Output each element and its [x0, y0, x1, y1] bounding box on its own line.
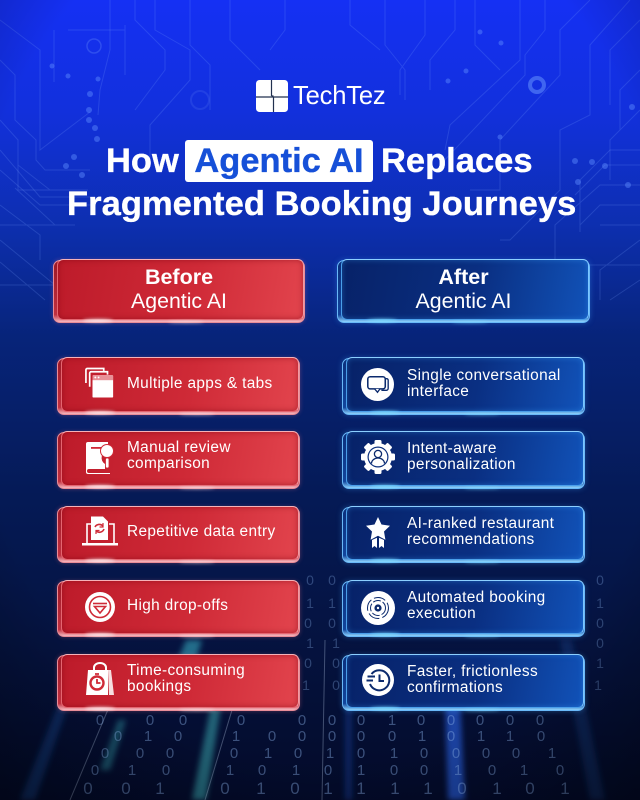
label [407, 663, 538, 696]
background: circuit board and binary pattern: 0 [556, 762, 564, 779]
background: circuit board and binary pattern: 0 [83, 779, 93, 798]
label: Intent-aware [407, 440, 497, 457]
label: confirmations [407, 679, 503, 696]
background: circuit board and binary pattern: 1 [596, 595, 604, 611]
background: circuit board and binary pattern: 0 [420, 762, 428, 779]
background: circuit board and binary pattern: 1 [128, 762, 136, 779]
background: circuit board and binary pattern: 0 [525, 779, 535, 798]
title word: Replaces: Replaces [381, 142, 533, 180]
heading: After Agentic AI: After [438, 265, 489, 289]
background: circuit board and binary pattern: 0 [230, 745, 238, 762]
background: circuit board and binary pattern: 1 [506, 728, 514, 745]
label: Single conversational [407, 367, 561, 384]
background: circuit board and binary pattern: 0 [332, 655, 340, 671]
background: circuit board and binary pattern: 0 [328, 572, 336, 588]
background: circuit board and binary pattern: 0 [101, 745, 109, 762]
background: circuit board and binary pattern: 0 [447, 728, 455, 745]
background: circuit board and binary pattern: 1 [264, 745, 272, 762]
background: circuit board and binary pattern: 1 [326, 745, 334, 762]
label: recommendations [407, 531, 535, 548]
background: circuit board and binary pattern: 0 [162, 762, 170, 779]
row: time-consuming bookings [54, 652, 302, 714]
background: circuit board and binary pattern: 0 [357, 712, 365, 729]
icon: book with magnifier [86, 442, 114, 474]
heading: After Agentic AI: Agentic AI [416, 289, 511, 313]
background: circuit board and binary pattern: 1 [292, 762, 300, 779]
background: circuit board and binary pattern: 1 [328, 595, 336, 611]
background: circuit board and binary pattern: 0 [136, 745, 144, 762]
label: execution [407, 605, 476, 622]
background: circuit board and binary pattern: 1 [423, 779, 433, 798]
background: circuit board and binary pattern: 0 [290, 779, 300, 798]
icon: orbit gear [361, 591, 395, 625]
background: circuit board and binary pattern: 0 [121, 779, 131, 798]
background: circuit board and binary pattern: 0 [357, 745, 365, 762]
background: circuit board and binary pattern: 0 [328, 712, 336, 729]
icon: chat bubbles [361, 368, 394, 401]
label: Automated booking [407, 589, 546, 606]
background: circuit board and binary pattern: 0 [146, 712, 154, 729]
background: circuit board and binary pattern: 1 [520, 762, 528, 779]
icon: fast clock [362, 664, 394, 696]
background: circuit board and binary pattern: 1 [144, 728, 152, 745]
row: AI-ranked restaurant recommendations [339, 504, 588, 566]
background: circuit board and binary pattern: 1 [477, 728, 485, 745]
background: circuit board and binary pattern: 0 [96, 712, 104, 729]
label: Faster, frictionless [407, 663, 538, 680]
heading: Before Agentic AI: Before [145, 265, 213, 289]
icon: logo window mark [256, 80, 288, 112]
heading: After Agentic AI [416, 265, 511, 313]
background: circuit board and binary pattern: 0 [306, 572, 314, 588]
label: bookings [127, 678, 191, 695]
label: personalization [407, 456, 516, 473]
row: faster frictionless confirmations [339, 652, 588, 714]
background: circuit board and binary pattern: 0 [304, 655, 312, 671]
background: circuit board and binary pattern: 1 [560, 779, 570, 798]
title line two: Fragmented Booking Journeys [67, 185, 576, 223]
label [407, 367, 561, 400]
wordmark: TechTez [293, 82, 386, 110]
background: circuit board and binary pattern: 1 [357, 762, 365, 779]
background: circuit board and binary pattern: 0 [268, 728, 276, 745]
row: intent-aware personalization [339, 430, 588, 492]
label: Manual review [127, 439, 231, 456]
panel: after header [334, 258, 592, 326]
background: circuit board and binary pattern: 1 [548, 745, 556, 762]
title highlight: Agentic AI: Agentic AI [194, 142, 364, 180]
background: circuit board and binary pattern: 0 [91, 762, 99, 779]
background: circuit board and binary pattern: 0 [220, 779, 230, 798]
row: multiple apps and tabs [54, 356, 302, 418]
background: circuit board and binary pattern: 1 [306, 595, 314, 611]
background: circuit board and binary pattern: 0 [304, 615, 312, 631]
label: comparison [127, 455, 210, 472]
background: circuit board and binary pattern: 1 [356, 779, 366, 798]
background: circuit board and binary pattern: 1 [306, 635, 314, 651]
background: circuit board and binary pattern: 0 [457, 779, 467, 798]
label: Repetitive data entry [127, 523, 276, 540]
label [407, 589, 546, 622]
background: circuit board and binary pattern: 0 [298, 712, 306, 729]
label: Time-consuming [127, 662, 245, 679]
background: circuit board and binary pattern: 1 [418, 728, 426, 745]
title [67, 140, 576, 223]
background: circuit board and binary pattern: 0 [482, 745, 490, 762]
background: circuit board and binary pattern: 0 [506, 712, 514, 729]
background: circuit board and binary pattern: 1 [155, 779, 165, 798]
background: circuit board and binary pattern: 0 [390, 762, 398, 779]
label [407, 440, 516, 473]
row: single conversational interface [340, 356, 588, 418]
icon: star award [366, 517, 390, 548]
icon: shopping bag with stopwatch [86, 662, 114, 695]
row: repetitive data entry [54, 504, 302, 566]
background: circuit board and binary pattern: 0 [294, 745, 302, 762]
background: circuit board and binary pattern: 1 [226, 762, 234, 779]
label [407, 515, 554, 548]
label [127, 439, 231, 472]
row: automated booking execution [339, 578, 588, 640]
background: circuit board and binary pattern: 1 [232, 728, 240, 745]
background: circuit board and binary pattern: 0 [332, 677, 340, 693]
icon: gear with person [361, 440, 395, 474]
background: circuit board and binary pattern: 1 [388, 712, 396, 729]
background: circuit board and binary pattern: 0 [179, 712, 187, 729]
icon: drop-off circle [85, 592, 115, 622]
background: circuit board and binary pattern: 0 [420, 745, 428, 762]
background: circuit board and binary pattern: 0 [166, 745, 174, 762]
background: circuit board and binary pattern: 1 [594, 677, 602, 693]
background: circuit board and binary pattern: 0 [258, 762, 266, 779]
background: circuit board and binary pattern: 1 [302, 677, 310, 693]
background: circuit board and binary pattern: 1 [256, 779, 266, 798]
icon: stacked windows [85, 368, 114, 398]
background: circuit board and binary pattern: 0 [512, 745, 520, 762]
background: circuit board and binary pattern: 0 [328, 615, 336, 631]
heading: Before Agentic AI [131, 265, 227, 313]
background: circuit board and binary pattern: 1 [332, 635, 340, 651]
row: high drop-offs [54, 578, 302, 640]
row: manual review comparison [54, 430, 302, 492]
background: circuit board and binary pattern: 0 [237, 712, 245, 729]
background: circuit board and binary pattern: 0 [536, 712, 544, 729]
background: circuit board and binary pattern: 0 [357, 728, 365, 745]
background: circuit board and binary pattern: 0 [417, 712, 425, 729]
background: circuit board and binary pattern: 0 [174, 728, 182, 745]
background: circuit board and binary pattern: 1 [454, 762, 462, 779]
background: circuit board and binary pattern: 1 [390, 745, 398, 762]
background: circuit board and binary pattern: 1 [596, 655, 604, 671]
label: AI-ranked restaurant [407, 515, 554, 532]
title word: How: How [106, 142, 179, 180]
background: circuit board and binary pattern: 1 [390, 779, 400, 798]
background: circuit board and binary pattern: 0 [452, 745, 460, 762]
label [127, 662, 245, 695]
background: circuit board and binary pattern: 1 [323, 779, 333, 798]
background: circuit board and binary pattern: 0 [476, 712, 484, 729]
background: circuit board and binary pattern: 0 [488, 762, 496, 779]
background: circuit board and binary pattern: 1 [492, 779, 502, 798]
background: circuit board and binary pattern: 0 [596, 615, 604, 631]
background: circuit board and binary pattern: 0 [324, 762, 332, 779]
logo: TechTez [256, 80, 386, 112]
background: circuit board and binary pattern: 0 [537, 728, 545, 745]
label: interface [407, 383, 469, 400]
background: circuit board and binary pattern: 0 [298, 728, 306, 745]
label: Multiple apps & tabs [127, 375, 273, 392]
background: circuit board and binary pattern: 0 [447, 712, 455, 729]
label: High drop-offs [127, 597, 228, 614]
panel: before header [50, 258, 308, 326]
icon: laptop with document [82, 516, 118, 546]
background: circuit board and binary pattern: 0 [388, 728, 396, 745]
background: circuit board and binary pattern: 0 [596, 572, 604, 588]
background: circuit board and binary pattern: 0 [114, 728, 122, 745]
heading: Before Agentic AI: Agentic AI [131, 289, 227, 313]
background: circuit board and binary pattern: 0 [596, 635, 604, 651]
background: circuit board and binary pattern: 0 [328, 728, 336, 745]
